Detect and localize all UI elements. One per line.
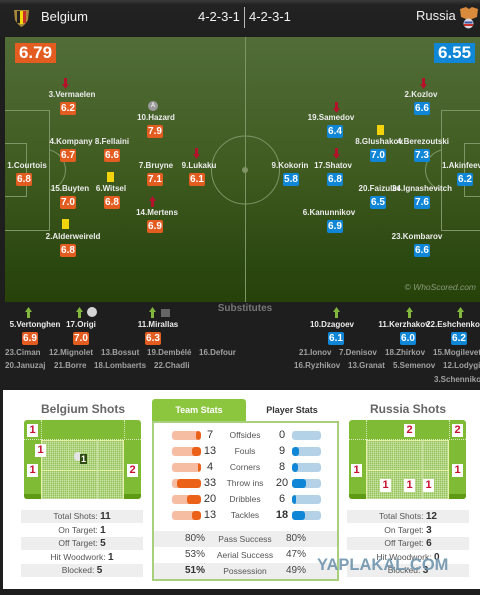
player: Lukaku bbox=[182, 161, 216, 186]
stat row: Possession bbox=[154, 563, 337, 579]
shot count upper post bbox=[35, 444, 46, 457]
player: Kozlov bbox=[404, 90, 438, 115]
player: Berezoutski: 7.3 bbox=[415, 150, 429, 161]
player: Berezoutski bbox=[397, 137, 449, 162]
stat row: Throw ins: 33 bbox=[204, 477, 216, 489]
player: Alderweireld: 6.8 bbox=[61, 245, 75, 256]
stat row: Corners bbox=[172, 461, 319, 473]
icon: yellow card Witsel bbox=[107, 172, 114, 182]
stat row: Pass Success bbox=[154, 531, 337, 547]
player: Kanunnikov: 6.Kanunnikov bbox=[303, 208, 355, 217]
stat row: Possession: Possession bbox=[223, 566, 267, 576]
stat row: Pass Success: Pass Success bbox=[218, 534, 272, 544]
shot stats: Belgium: Hit Woodwork: 1 bbox=[50, 552, 114, 562]
icon: sub on Eshchenko bbox=[457, 307, 464, 318]
sub: Mirallas bbox=[138, 320, 178, 345]
player: Vermaelen: 6.2 bbox=[61, 103, 75, 114]
shot count wide left bbox=[351, 464, 362, 477]
goal map: Russia bbox=[349, 420, 466, 499]
player: Mertens: 6.9 bbox=[148, 221, 162, 232]
Belgium bench list: 19.Dembélé bbox=[147, 348, 191, 357]
stat row: Aerial Success: Aerial Success bbox=[217, 550, 273, 560]
player: Hazard: 10.Hazard bbox=[137, 113, 175, 122]
icon: sub on Mirallas bbox=[149, 307, 156, 318]
stat row: Tackles: 13 bbox=[204, 509, 216, 521]
player: Faizulin bbox=[358, 184, 399, 209]
stat row: Offsides: 0 bbox=[279, 429, 285, 441]
icon: goal ball Origi bbox=[87, 307, 97, 317]
stat row: Throw ins: 20 bbox=[276, 477, 288, 489]
shot on target marker: 1 bbox=[81, 454, 86, 464]
player: Ignashevitch: 7.6 bbox=[415, 197, 429, 208]
player: Ignashevitch bbox=[392, 184, 452, 209]
shot stats: Belgium: Total Shots: 11 bbox=[53, 511, 111, 522]
shot count wide left bbox=[27, 464, 38, 477]
Russia bench list bbox=[240, 347, 480, 387]
icon: assist Hazard bbox=[148, 101, 158, 111]
sub: Eshchenko: 22.Eshchenko bbox=[426, 320, 480, 329]
player: Shatov: 6.8 bbox=[328, 174, 342, 185]
Belgium bench list: 16.Defour bbox=[199, 348, 236, 357]
Belgium bench list: 20.Januzaj bbox=[5, 361, 45, 370]
stat row: Dribbles: 6 bbox=[279, 493, 285, 505]
stat row: Offsides bbox=[172, 429, 319, 441]
sub: Dzagoev: 6.1 bbox=[329, 333, 343, 344]
sub: Mirallas: 11.Mirallas bbox=[138, 320, 178, 329]
Russia team rating: 6.55 bbox=[438, 43, 471, 62]
stat row: Fouls bbox=[172, 445, 319, 457]
player: Kokorin bbox=[272, 161, 308, 186]
player: Glushakov bbox=[355, 137, 403, 162]
player: Mertens bbox=[136, 208, 178, 233]
player: Vermaelen: 3.Vermaelen bbox=[49, 90, 95, 99]
stat row: Fouls: 9 bbox=[279, 445, 285, 457]
shot stats: Belgium: Blocked: 5 bbox=[62, 565, 102, 576]
shot count low centre: 1 bbox=[406, 479, 413, 491]
shot stats: Belgium bbox=[21, 510, 143, 577]
player: Kombarov: 23.Kombarov bbox=[392, 232, 442, 241]
credit: WhoScored: © WhoScored.com bbox=[405, 282, 476, 292]
icon: Belgium crest bbox=[14, 10, 29, 27]
player: Lukaku: 9.Lukaku bbox=[182, 161, 216, 170]
player: Hazard: 7.9 bbox=[148, 126, 162, 137]
icon: sub off Vermaelen bbox=[62, 78, 69, 89]
player: Mertens: 14.Mertens bbox=[136, 208, 178, 217]
icon: assist Hazard: A bbox=[151, 103, 155, 109]
pitch bbox=[5, 37, 480, 302]
Belgium team rating: 6.79 bbox=[19, 43, 52, 62]
stat row: Offsides: 7 bbox=[207, 429, 213, 441]
player: Kompany bbox=[49, 137, 93, 162]
team name: Russia: Russia bbox=[416, 8, 456, 23]
Russia bench list: 18.Zhirkov bbox=[385, 348, 425, 357]
sub: Vertonghen: 5.Vertonghen bbox=[10, 320, 60, 329]
shot stats: Russia: Hit Woodwork: 0 bbox=[376, 552, 440, 562]
player: Samedov: 6.4 bbox=[328, 126, 342, 137]
Russia bench list: 5.Semenov bbox=[393, 361, 435, 370]
player: Kozlov: 6.6 bbox=[415, 103, 429, 114]
shot stats: Russia: Off Target: 6 bbox=[384, 538, 432, 549]
team stats box bbox=[152, 421, 339, 581]
player: Fellaini bbox=[95, 137, 129, 162]
stat row: Corners: 8 bbox=[279, 461, 285, 473]
shot count wide right: 2 bbox=[129, 464, 136, 476]
icon: sub off Shatov bbox=[333, 148, 340, 159]
sub: Kerzhakov: 6.0 bbox=[401, 333, 415, 344]
Russia bench list: 16.Ryzhikov bbox=[294, 361, 340, 370]
heading: Substitutes: Substitutes bbox=[218, 303, 272, 314]
player: Witsel: 6.Witsel bbox=[96, 184, 126, 193]
shot stats: Russia bbox=[347, 510, 469, 577]
player: Fellaini: 6.6 bbox=[105, 150, 119, 161]
player: Courtois: 1.Courtois bbox=[7, 161, 47, 170]
player: Kompany: 4.Kompany bbox=[49, 137, 93, 146]
stat row: Dribbles bbox=[172, 493, 319, 505]
player: Kokorin: 5.8 bbox=[284, 174, 298, 185]
stat row: Possession: 49% bbox=[286, 565, 306, 576]
header bar bbox=[0, 0, 480, 37]
shot count wide left: 1 bbox=[29, 464, 36, 476]
player: Ignashevitch: 24.Ignashevitch bbox=[392, 184, 452, 193]
Russia bench list: 21.Ionov bbox=[299, 348, 331, 357]
tab: Team Stats bbox=[152, 399, 246, 422]
stat row: Throw ins: Throw ins bbox=[227, 478, 263, 488]
player: Samedov bbox=[308, 113, 354, 138]
Russia bench list: 7.Denisov bbox=[339, 348, 377, 357]
sub: Vertonghen bbox=[10, 320, 60, 345]
Belgium bench list bbox=[0, 347, 240, 373]
shot count high left bbox=[27, 424, 38, 437]
icon: yellow card Glushakov bbox=[377, 125, 384, 135]
stat row: Fouls: Fouls bbox=[235, 446, 255, 456]
sub: Dzagoev: 10.Dzagoev bbox=[310, 320, 354, 329]
player: Alderweireld bbox=[46, 232, 100, 257]
icon: sub off Samedov bbox=[333, 102, 340, 113]
player: Lukaku: 6.1 bbox=[190, 174, 204, 185]
shot count high centre: 2 bbox=[406, 424, 413, 436]
sub: Vertonghen: 6.9 bbox=[23, 333, 37, 344]
shot count low right bbox=[423, 479, 434, 492]
Belgium bench list: 21.Borre bbox=[54, 361, 86, 370]
player: Buyten: 7.0 bbox=[61, 197, 75, 208]
stat row: Possession: 51% bbox=[185, 565, 205, 576]
Belgium bench list: 22.Chadli bbox=[154, 361, 190, 370]
player: Akinfeev: 6.2 bbox=[458, 174, 472, 185]
shot count high right bbox=[452, 424, 463, 437]
icon: woodwork Mirallas bbox=[161, 309, 170, 317]
sub: Eshchenko: 6.2 bbox=[452, 333, 466, 344]
player: Glushakov: 8.Glushakov bbox=[355, 137, 403, 146]
tab: Player Stats: Player Stats bbox=[266, 405, 318, 415]
icon: sub off Mertens bbox=[149, 196, 156, 207]
player: Berezoutski: 4.Berezoutski bbox=[397, 137, 449, 146]
shot stats: Russia: Total Shots: 12 bbox=[379, 511, 437, 522]
player: Hazard bbox=[137, 113, 175, 138]
shot on target marker bbox=[74, 452, 88, 464]
Russia bench list: 13.Granat bbox=[348, 361, 385, 370]
player: Courtois bbox=[7, 161, 47, 186]
team name: Belgium: Belgium bbox=[41, 9, 88, 24]
shot count wide right bbox=[452, 464, 463, 477]
icon: sub on Kerzhakov bbox=[406, 307, 413, 318]
shot count high centre bbox=[404, 424, 415, 437]
stat row: Dribbles: 20 bbox=[204, 493, 216, 505]
stats panel bbox=[3, 390, 480, 589]
player: Shatov: 17.Shatov bbox=[314, 161, 352, 170]
player: Akinfeev bbox=[442, 161, 480, 186]
Belgium bench list: 13.Bossut bbox=[101, 348, 139, 357]
stat row: Aerial Success: 47% bbox=[286, 549, 306, 560]
stat row: Tackles bbox=[172, 509, 319, 521]
stat row: Dribbles: Dribbles bbox=[229, 494, 261, 504]
stat row: Offsides: Offsides bbox=[229, 430, 261, 440]
shot stats: Russia: On Target: 3 bbox=[384, 524, 432, 536]
sub: Dzagoev bbox=[310, 320, 354, 345]
player: Kozlov: 2.Kozlov bbox=[405, 90, 437, 99]
player: Buyten bbox=[51, 184, 89, 209]
shot count high left: 1 bbox=[29, 424, 36, 436]
stat row: Throw ins bbox=[172, 477, 319, 489]
shot count wide left: 1 bbox=[353, 464, 360, 476]
sub: Kerzhakov: 11.Kerzhakov bbox=[378, 320, 430, 329]
stat row: Pass Success: 80% bbox=[185, 533, 205, 544]
stat row: Aerial Success bbox=[154, 547, 337, 563]
shot stats: Russia: Blocked: 3 bbox=[388, 565, 428, 576]
shot stats: Belgium: Off Target: 5 bbox=[58, 538, 106, 549]
shot count low centre bbox=[404, 479, 415, 492]
stat row: Pass Success: 80% bbox=[286, 533, 306, 544]
heading: Russia Shots: Russia Shots bbox=[370, 402, 446, 416]
player: Kanunnikov: 6.9 bbox=[328, 221, 342, 232]
icon: sub on Origi bbox=[76, 307, 83, 318]
stat row: Tackles: Tackles bbox=[231, 510, 259, 520]
player: Alderweireld: 2.Alderweireld bbox=[46, 232, 100, 241]
player: Fellaini: 8.Fellaini bbox=[95, 137, 129, 146]
sub: Origi: 7.0 bbox=[74, 333, 88, 344]
shot count low right: 1 bbox=[425, 479, 432, 491]
player: Kompany: 6.7 bbox=[61, 150, 75, 161]
icon: sub on Vertonghen bbox=[25, 307, 32, 318]
player: Kokorin: 9.Kokorin bbox=[272, 161, 308, 170]
Belgium bench list: 18.Lombaerts bbox=[94, 361, 146, 370]
player: Witsel bbox=[96, 184, 126, 209]
player: Bruyne: 7.1 bbox=[148, 174, 162, 185]
goal map: Belgium bbox=[24, 420, 141, 499]
icon: sub off Lukaku bbox=[193, 148, 200, 159]
shot stats: Belgium: On Target: 1 bbox=[58, 524, 106, 536]
player: Bruyne: 7.Bruyne bbox=[139, 161, 173, 170]
icon: Russia crest bbox=[460, 7, 478, 28]
Belgium formation: 4-2-3-1 bbox=[198, 9, 240, 24]
Belgium bench list: 23.Ciman bbox=[5, 348, 41, 357]
shot count upper post: 1 bbox=[37, 444, 44, 456]
shot count wide right: 1 bbox=[454, 464, 461, 476]
stat row: Aerial Success: 53% bbox=[185, 549, 205, 560]
stat row: Corners: 4 bbox=[207, 461, 213, 473]
player: Kanunnikov bbox=[303, 208, 356, 233]
sub: Kerzhakov bbox=[378, 320, 430, 345]
player: Buyten: 15.Buyten bbox=[51, 184, 89, 193]
Russia formation: 4-2-3-1 bbox=[249, 9, 291, 24]
player: Samedov: 19.Samedov bbox=[308, 113, 354, 122]
player: Kombarov bbox=[392, 232, 442, 257]
icon: yellow card Alderweireld bbox=[62, 219, 69, 229]
sub: Eshchenko bbox=[419, 319, 480, 345]
icon: sub off Kozlov bbox=[420, 78, 427, 89]
player: Glushakov: 7.0 bbox=[371, 150, 385, 161]
player: Shatov bbox=[314, 161, 352, 186]
shot count high right: 2 bbox=[454, 424, 461, 436]
sub: Origi bbox=[66, 320, 96, 345]
sub: Mirallas: 6.3 bbox=[146, 333, 160, 344]
stat row: Corners: Corners bbox=[230, 462, 260, 472]
player: Witsel: 6.8 bbox=[105, 197, 119, 208]
player: Faizulin: 20.Faizulin bbox=[359, 184, 399, 193]
shot count low left bbox=[380, 479, 391, 492]
heading: Belgium Shots: Belgium Shots bbox=[41, 402, 125, 416]
player: Faizulin: 6.5 bbox=[371, 197, 385, 208]
stat row: Fouls: 13 bbox=[204, 445, 216, 457]
icon: sub on Dzagoev bbox=[333, 307, 340, 318]
player: Kombarov: 6.6 bbox=[415, 245, 429, 256]
stat row: Tackles: 18 bbox=[276, 509, 288, 521]
player: Bruyne bbox=[139, 161, 173, 186]
Belgium bench list: 12.Mignolet bbox=[49, 348, 93, 357]
player: Courtois: 6.8 bbox=[17, 174, 31, 185]
shot count wide right bbox=[127, 464, 138, 477]
watermark: YAPLAKAL.COM: YAPLAKAL.COM bbox=[317, 556, 448, 574]
divider between formations bbox=[244, 7, 245, 28]
shot count low left: 1 bbox=[382, 479, 389, 491]
tab: Team Stats: Team Stats bbox=[175, 405, 223, 415]
sub: Origi: 17.Origi bbox=[66, 320, 96, 329]
player: Vermaelen bbox=[48, 90, 95, 115]
